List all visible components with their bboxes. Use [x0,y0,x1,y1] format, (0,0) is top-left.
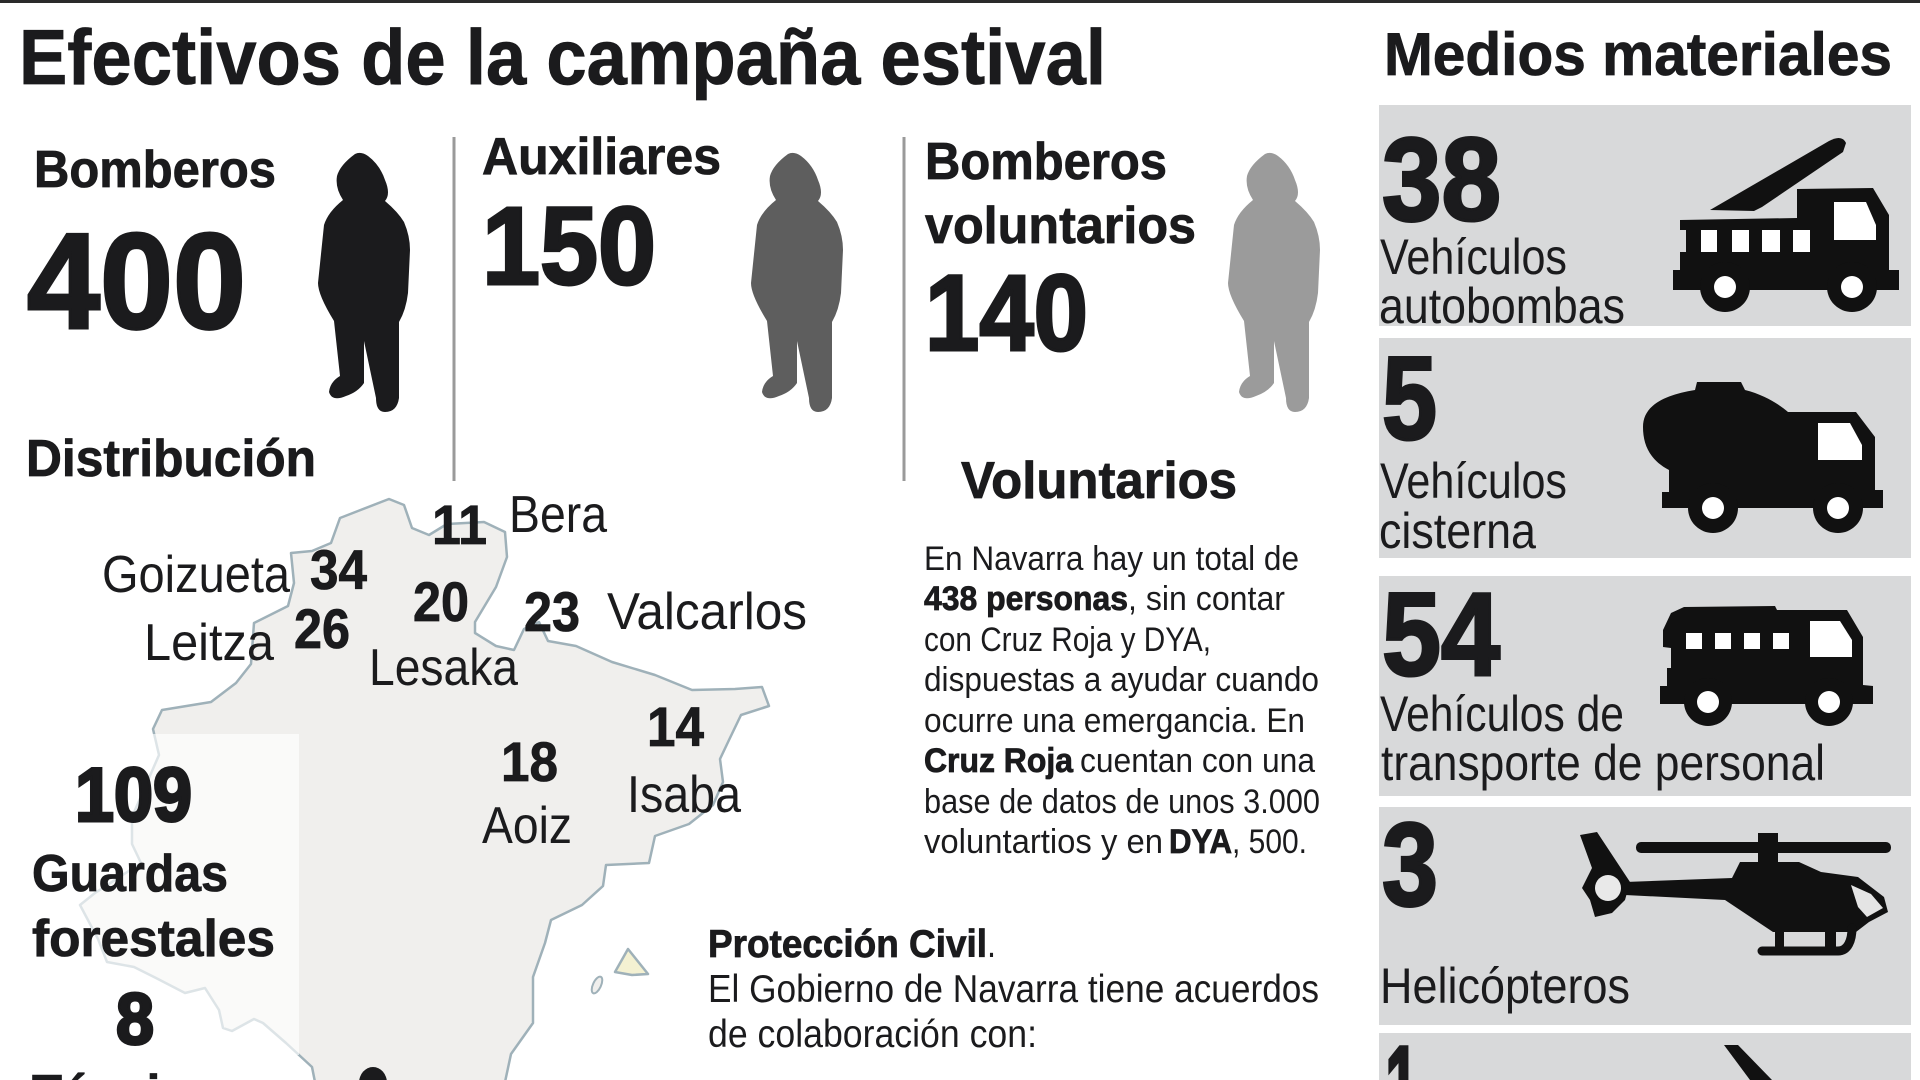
number: 38: 38 [1382,114,1501,246]
text block: voluntarios: Cruz Roja [924,742,1074,780]
stat: guardas forestales: forestales [32,910,275,968]
label: auxiliares: Auxiliares [482,128,721,186]
label: vehículos de transporte de personal [1380,686,1825,791]
label: helicópteros: Helicópteros [1380,958,1630,1014]
enclave: Petilla small [590,975,604,995]
icon: airplane tail [1724,1045,1772,1080]
text block: voluntarios: dispuestas a ayudar cuando [924,661,1319,699]
panel: avión [1379,1022,1911,1080]
label: bomberos voluntarios [925,133,1196,255]
label: vehículos cisterna: Vehículos [1380,453,1567,509]
text block: voluntarios: DYA [1169,823,1232,861]
number: 5: 5 [1382,333,1437,465]
number: 54: 54 [1382,569,1500,701]
text block: voluntarios: , 500. [1232,823,1307,861]
text block: voluntarios [924,540,1320,861]
text block: voluntarios: , sin contar [1128,580,1285,618]
label: vehículos de transporte de personal: transporte de personal [1381,735,1825,791]
divider right [902,137,906,481]
text block: voluntarios: 438 personas [924,580,1128,618]
heading: medios materiales: Medios materiales [1384,21,1892,88]
stat: guardas forestales: 109 [75,753,192,838]
text block: protección civil [708,923,1319,1056]
text block: protección civil: Protección Civil [708,923,987,966]
icon: bus [1660,606,1873,726]
number: 3: 3 [1382,799,1438,931]
text block: voluntarios: con Cruz Roja y DYA, [924,621,1211,659]
station: Bera [432,486,607,556]
text block: protección civil: de colaboración con: [708,1013,1037,1056]
icon: tanker truck [1643,382,1883,533]
panel: cisterna [1379,333,1911,559]
icon: firefighter silhouette dark grey [751,153,843,412]
text block: voluntarios: ocurre una emergancia. En [924,702,1305,740]
panel: transporte de personal [1379,569,1911,796]
number: 150: 150 [482,185,656,308]
panel: auxiliares [482,128,843,412]
text block: voluntarios: En Navarra hay un total de [924,540,1299,578]
panel: autobombas [1379,105,1911,334]
label: bomberos voluntarios: voluntarios [925,197,1196,255]
heading: distribución: Distribución [26,430,316,488]
label: vehículos autobombas: autobombas [1379,278,1625,334]
label: vehículos autobombas: Vehículos [1380,229,1567,285]
label: vehículos cisterna [1379,453,1567,559]
icon: firefighter silhouette light grey [1228,153,1320,412]
divider left [452,137,456,481]
number: 140: 140 [925,252,1088,373]
label: vehículos autobombas [1379,229,1625,334]
map outline [80,499,769,1080]
station: Valcarlos: 23 [524,580,580,643]
label: bomberos voluntarios: Bomberos [925,133,1167,191]
station: Lesaka [369,570,518,697]
panel: bomberos voluntarios [925,133,1320,412]
panel: helicópteros [1379,799,1911,1025]
station: Isaba [627,695,741,824]
text block: protección civil: El Gobierno de Navarra tiene acuerdos [708,968,1319,1011]
station: Bera: 11 [432,493,487,556]
station: Valcarlos [524,580,807,643]
station: Isaba: Isaba [627,766,741,824]
station: Aoiz: 18 [501,730,558,793]
station: Goizueta: 34 [310,538,367,601]
station: Aoiz [482,730,572,855]
enclave: Petilla large [615,949,648,975]
icon: fire truck [1673,138,1899,312]
station: Aoiz: Aoiz [482,797,572,855]
station: Leitza: 26 [294,597,350,660]
station: Isaba: 14 [647,695,704,758]
station: Leitza: Leitza [144,614,274,672]
title: Efectivos de la campaña estival [19,13,1106,101]
station: Valcarlos: Valcarlos [607,583,807,641]
label: vehículos de transporte de personal: Vehículos de [1380,686,1624,742]
icon: helicopter [1580,832,1891,951]
stat: técnicos [32,980,245,1080]
station: Lesaka: Lesaka [369,639,518,697]
text block: voluntarios: base de datos de unos 3.000 [924,783,1320,821]
stat: técnicos: 8 [116,980,154,1060]
stat: guardas forestales [32,753,275,968]
translucent text backdrop [0,734,299,1055]
number: 400: 400 [27,205,246,357]
label: vehículos cisterna: cisterna [1379,503,1536,559]
text block: protección civil: . [987,923,996,966]
icon: firefighter silhouette black [318,153,410,412]
panel: bomberos [27,141,410,412]
map: Navarra distribution [0,486,807,1080]
station: Lesaka: 20 [413,570,469,633]
station: Bera: Bera [509,486,607,544]
heading: voluntarios: Voluntarios [961,452,1237,510]
marker: Pamplona [359,1067,387,1080]
label: bomberos: Bomberos [34,141,276,199]
station: Goizueta: Goizueta [102,546,290,604]
station: Goizueta [102,538,367,604]
text block: voluntarios: voluntartios y en [924,823,1163,861]
text block: voluntarios: cuentan con una [1080,742,1315,780]
stat: guardas forestales: Guardas [32,845,228,903]
station: Leitza [144,597,350,672]
